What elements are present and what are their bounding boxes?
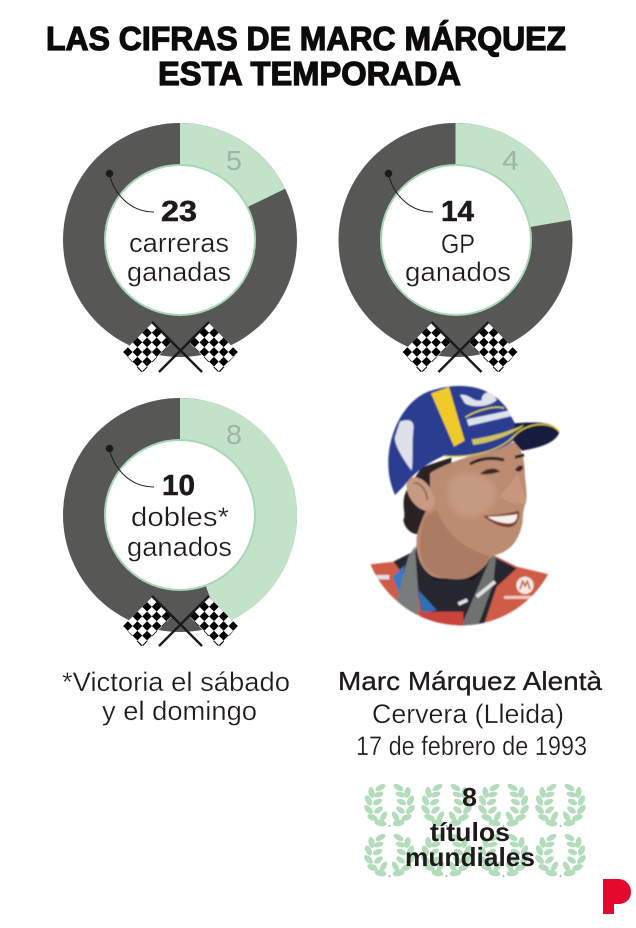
face — [416, 442, 527, 579]
title — [46, 20, 566, 92]
logo: Público P — [603, 879, 631, 914]
donut chart: GP ganados: 14 — [441, 196, 474, 228]
laurel wreaths: 8 world titles: títulos — [430, 817, 510, 847]
donut chart: GP ganados — [338, 123, 572, 373]
donut chart: carreras ganadas — [63, 123, 297, 373]
donut chart: GP ganados: GP — [441, 229, 475, 259]
footnote: y el domingo — [102, 696, 257, 726]
ear — [407, 477, 435, 511]
rider name and details: Marc Márquez Alentà — [338, 666, 603, 696]
portrait: Marc Márquez — [360, 386, 559, 633]
laurel wreaths: 8 world titles — [362, 782, 588, 877]
donut chart: dobles ganados: dobles* — [131, 502, 229, 532]
donut chart: carreras ganadas: 23 — [161, 196, 197, 228]
donut chart: GP ganados: ganados — [405, 257, 511, 287]
donut chart: GP ganados: 4 — [502, 145, 519, 176]
footnote — [62, 667, 290, 726]
donut chart: dobles ganados: ganados — [127, 532, 232, 562]
donut chart: dobles ganados: 10 — [162, 470, 195, 502]
donut chart: carreras ganadas: ganadas — [127, 257, 231, 287]
donut chart: dobles ganados: 8 — [226, 419, 242, 450]
nose — [500, 473, 525, 503]
cap — [388, 386, 559, 495]
laurel wreaths: 8 world titles: 8 — [462, 782, 477, 812]
donut chart: carreras ganadas: 5 — [226, 145, 242, 176]
footnote: *Victoria el sábado — [62, 667, 290, 697]
rider name and details — [338, 666, 603, 761]
rider name and details: Cervera (Lleida) — [372, 699, 564, 729]
eyes and brows — [470, 455, 524, 464]
donut chart: carreras ganadas: carreras — [129, 228, 229, 258]
hair — [403, 457, 452, 534]
title: ESTA TEMPORADA — [158, 55, 461, 92]
mouth — [483, 511, 519, 527]
laurel wreaths: 8 world titles: mundiales — [405, 842, 535, 872]
title: LAS CIFRAS DE MARC MÁRQUEZ — [46, 20, 566, 57]
rider name and details: 17 de febrero de 1993 — [356, 731, 587, 761]
donut chart: dobles ganados — [63, 398, 297, 647]
